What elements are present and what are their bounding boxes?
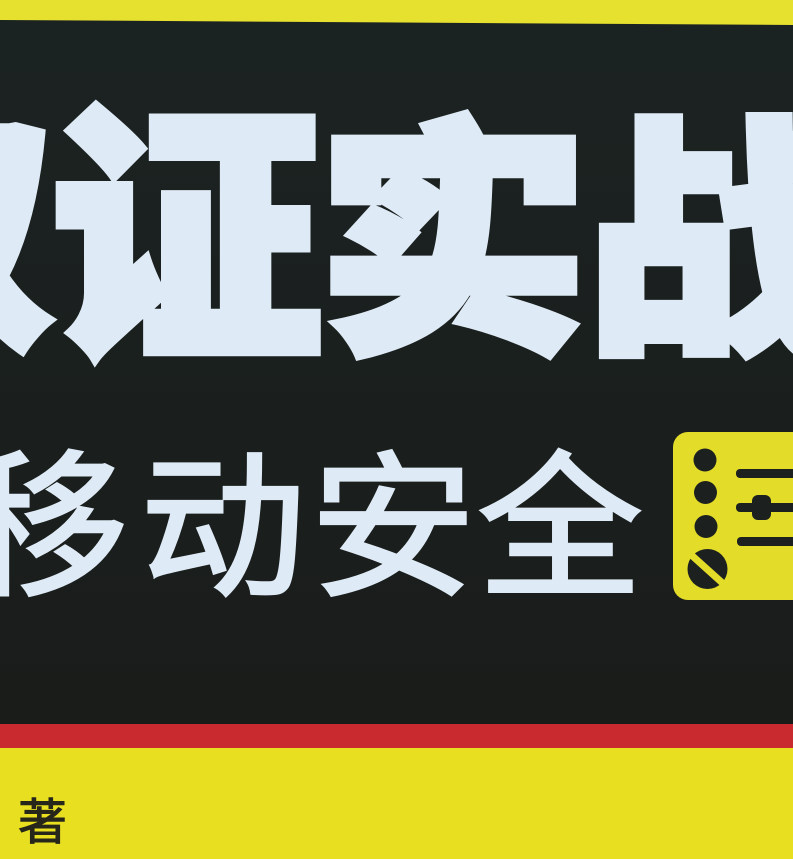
red stripe <box>0 724 793 748</box>
main title <box>0 100 793 368</box>
author label: 著 <box>18 796 67 850</box>
subtitle glyph 全: 全 <box>477 442 643 618</box>
subtitle glyph 安: 安 <box>310 442 476 618</box>
icon: yellow device panel <box>673 432 793 600</box>
title glyph 证: 证 <box>52 92 322 393</box>
title glyph 实: 实 <box>318 108 588 385</box>
subtitle glyph 动: 动 <box>140 442 306 618</box>
top yellow band <box>0 0 793 26</box>
subtitle <box>0 447 642 598</box>
